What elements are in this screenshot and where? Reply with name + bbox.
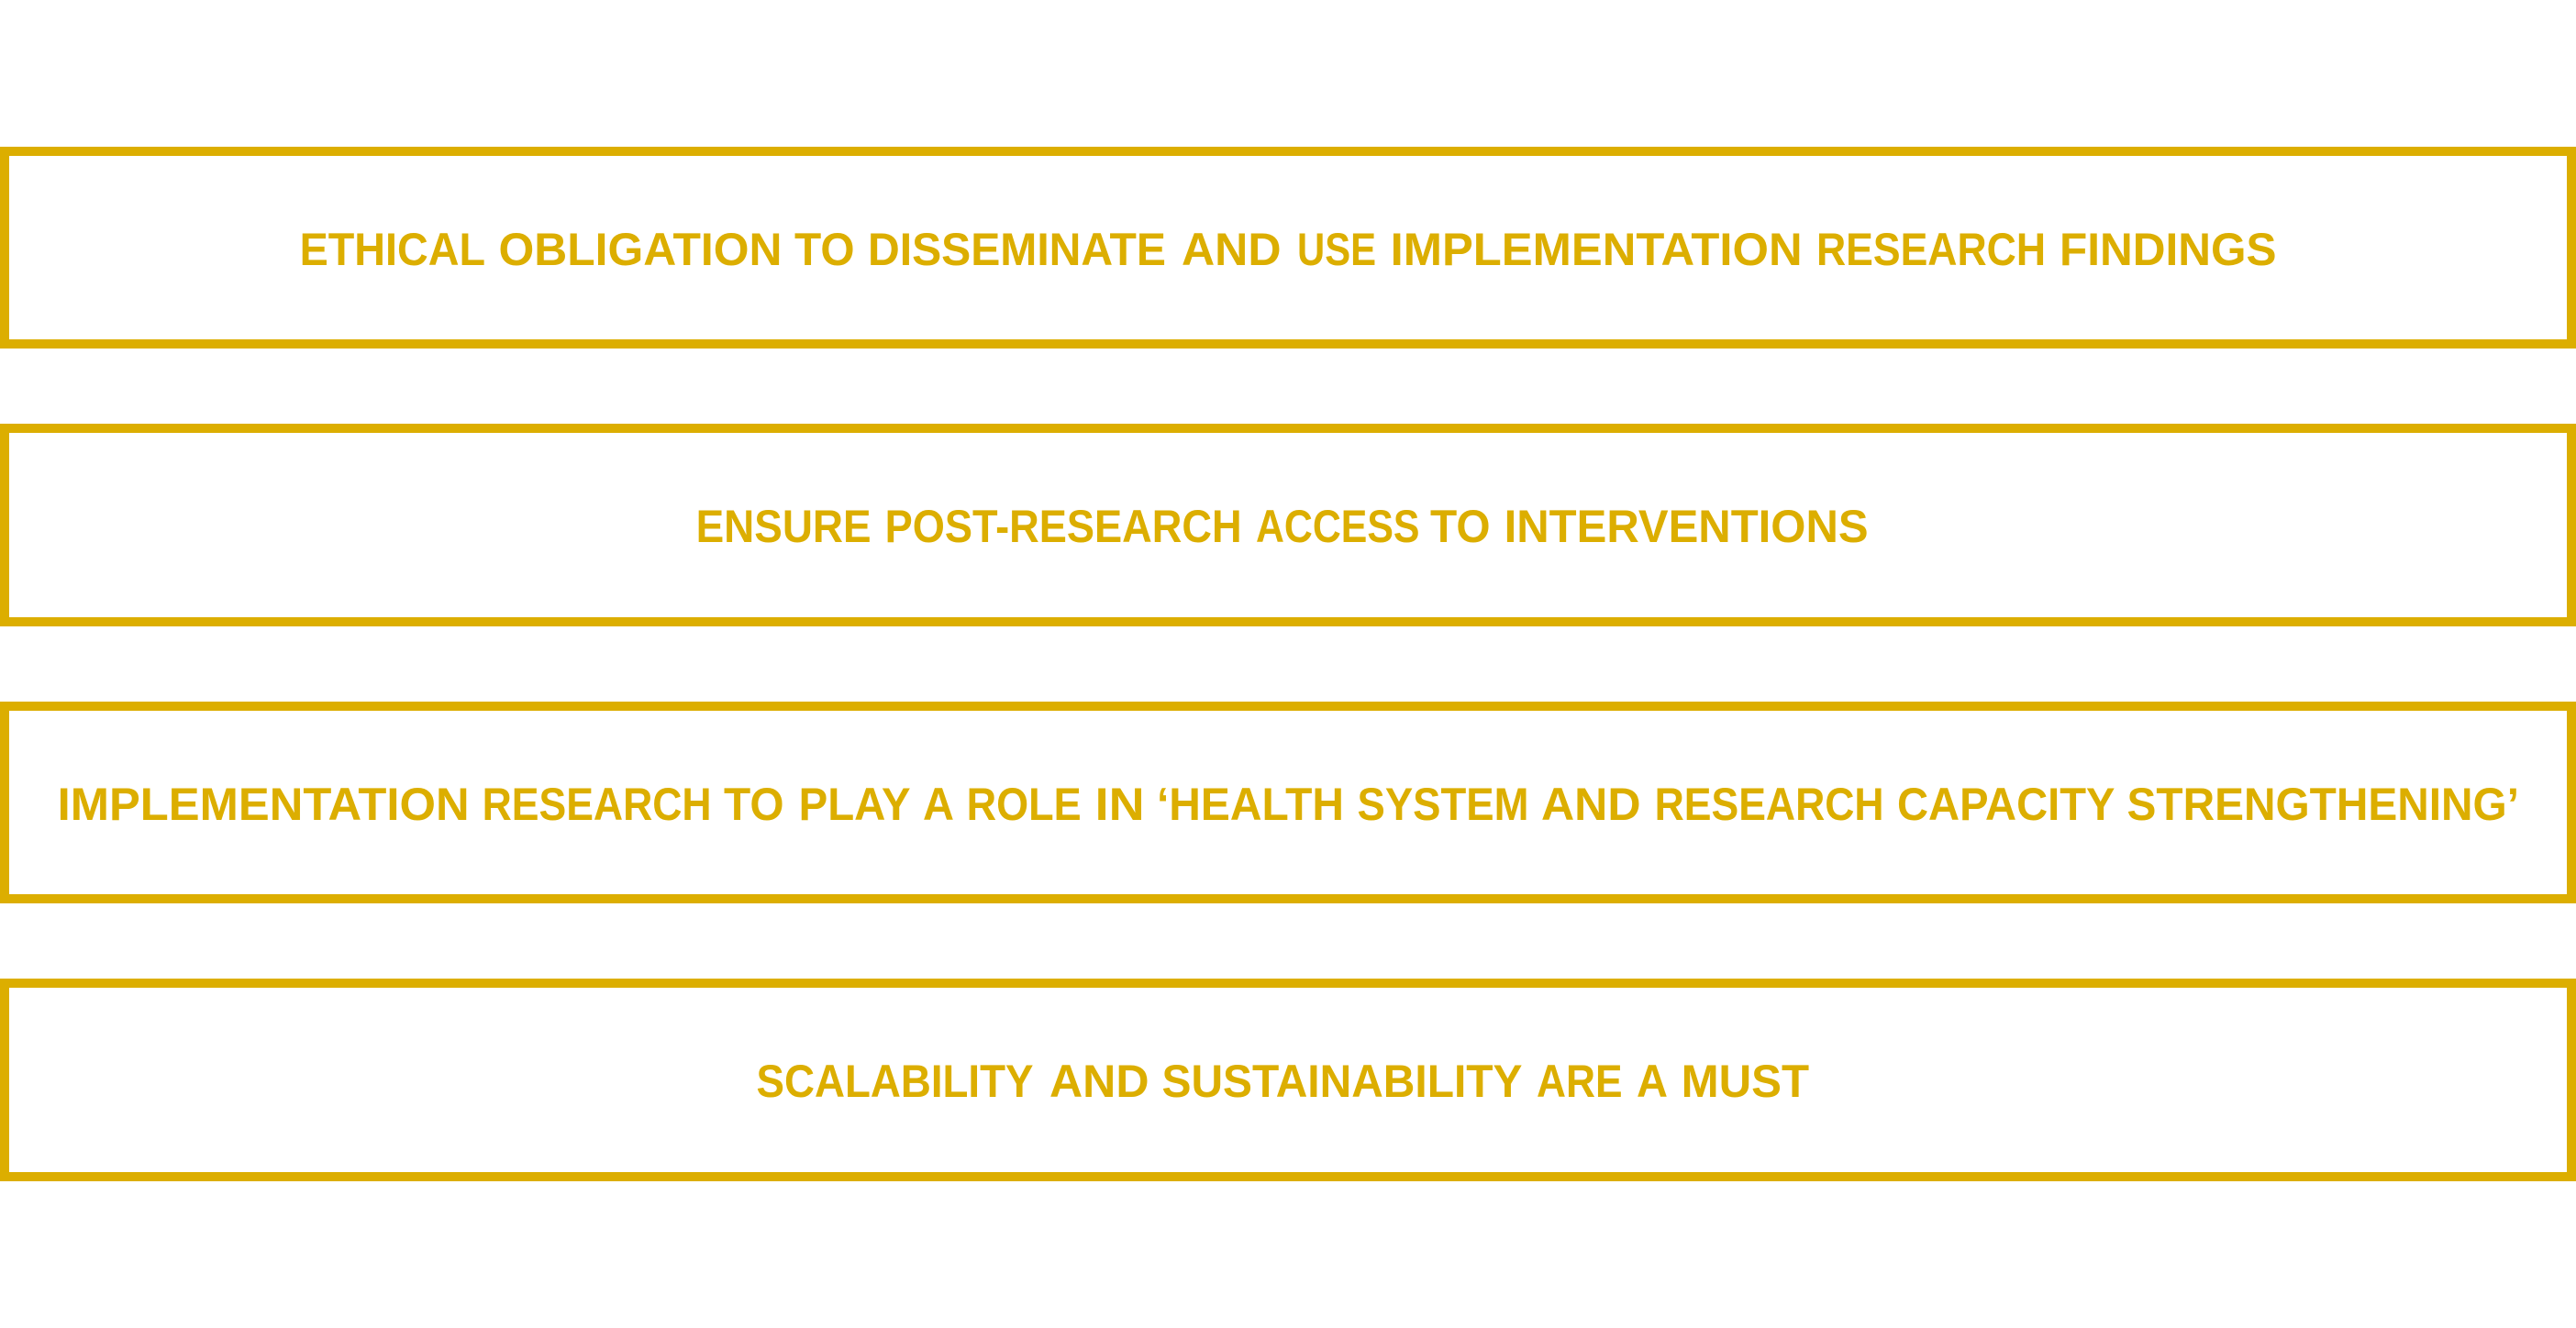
text: ethical obligation: IMPLEMENTATION xyxy=(1391,223,1803,275)
text: post-research access: TO xyxy=(1430,500,1490,552)
text: capacity strengthening: AND xyxy=(1541,778,1640,830)
text: capacity strengthening: A xyxy=(923,778,954,830)
panel: scalability and sustainability xyxy=(5,983,2571,1177)
text: scalability and sustainability: SUSTAINABILITY xyxy=(1161,1055,1523,1107)
text: capacity strengthening: SYSTEM xyxy=(1358,778,1528,830)
text: capacity strengthening: IN xyxy=(1095,778,1145,830)
text: ethical obligation: FINDINGS xyxy=(2060,223,2277,275)
text: scalability and sustainability: MUST xyxy=(1682,1055,1809,1107)
text: capacity strengthening: CAPACITY xyxy=(1897,778,2115,830)
text: capacity strengthening: ‘HEALTH xyxy=(1157,778,1344,830)
text: ethical obligation: AND xyxy=(1182,223,1281,275)
text: post-research access: ENSURE xyxy=(696,500,872,552)
text: ethical obligation: OBLIGATION xyxy=(499,223,782,275)
text: capacity strengthening: RESEARCH xyxy=(483,778,712,830)
text: ethical obligation: DISSEMINATE xyxy=(868,223,1166,275)
text: post-research access xyxy=(696,500,1869,552)
text: scalability and sustainability: A xyxy=(1637,1055,1668,1107)
text: ethical obligation: TO xyxy=(794,223,855,275)
panel: post-research access xyxy=(5,428,2571,622)
text: capacity strengthening: STRENGTHENING’ xyxy=(2126,778,2519,830)
text: ethical obligation: USE xyxy=(1297,223,1376,275)
text: capacity strengthening xyxy=(58,778,2519,830)
text: capacity strengthening: RESEARCH xyxy=(1655,778,1884,830)
text: capacity strengthening: IMPLEMENTATION xyxy=(58,778,470,830)
text: post-research access: ACCESS xyxy=(1256,500,1420,552)
text: ethical obligation xyxy=(300,223,2276,275)
text: scalability and sustainability: AND xyxy=(1049,1055,1149,1107)
text: post-research access: INTERVENTIONS xyxy=(1505,500,1869,552)
text: capacity strengthening: PLAY xyxy=(799,778,911,830)
text: post-research access: POST-RESEARCH xyxy=(885,500,1242,552)
panel: ethical obligation xyxy=(5,151,2571,344)
text: ethical obligation: ETHICAL xyxy=(300,223,485,275)
text: scalability and sustainability: SCALABILITY xyxy=(756,1055,1033,1107)
text: ethical obligation: RESEARCH xyxy=(1816,223,2046,275)
text: scalability and sustainability xyxy=(756,1055,1809,1107)
text: capacity strengthening: ROLE xyxy=(967,778,1082,830)
panel: capacity strengthening xyxy=(5,706,2571,899)
text: scalability and sustainability: ARE xyxy=(1537,1055,1622,1107)
text: capacity strengthening: TO xyxy=(724,778,783,830)
